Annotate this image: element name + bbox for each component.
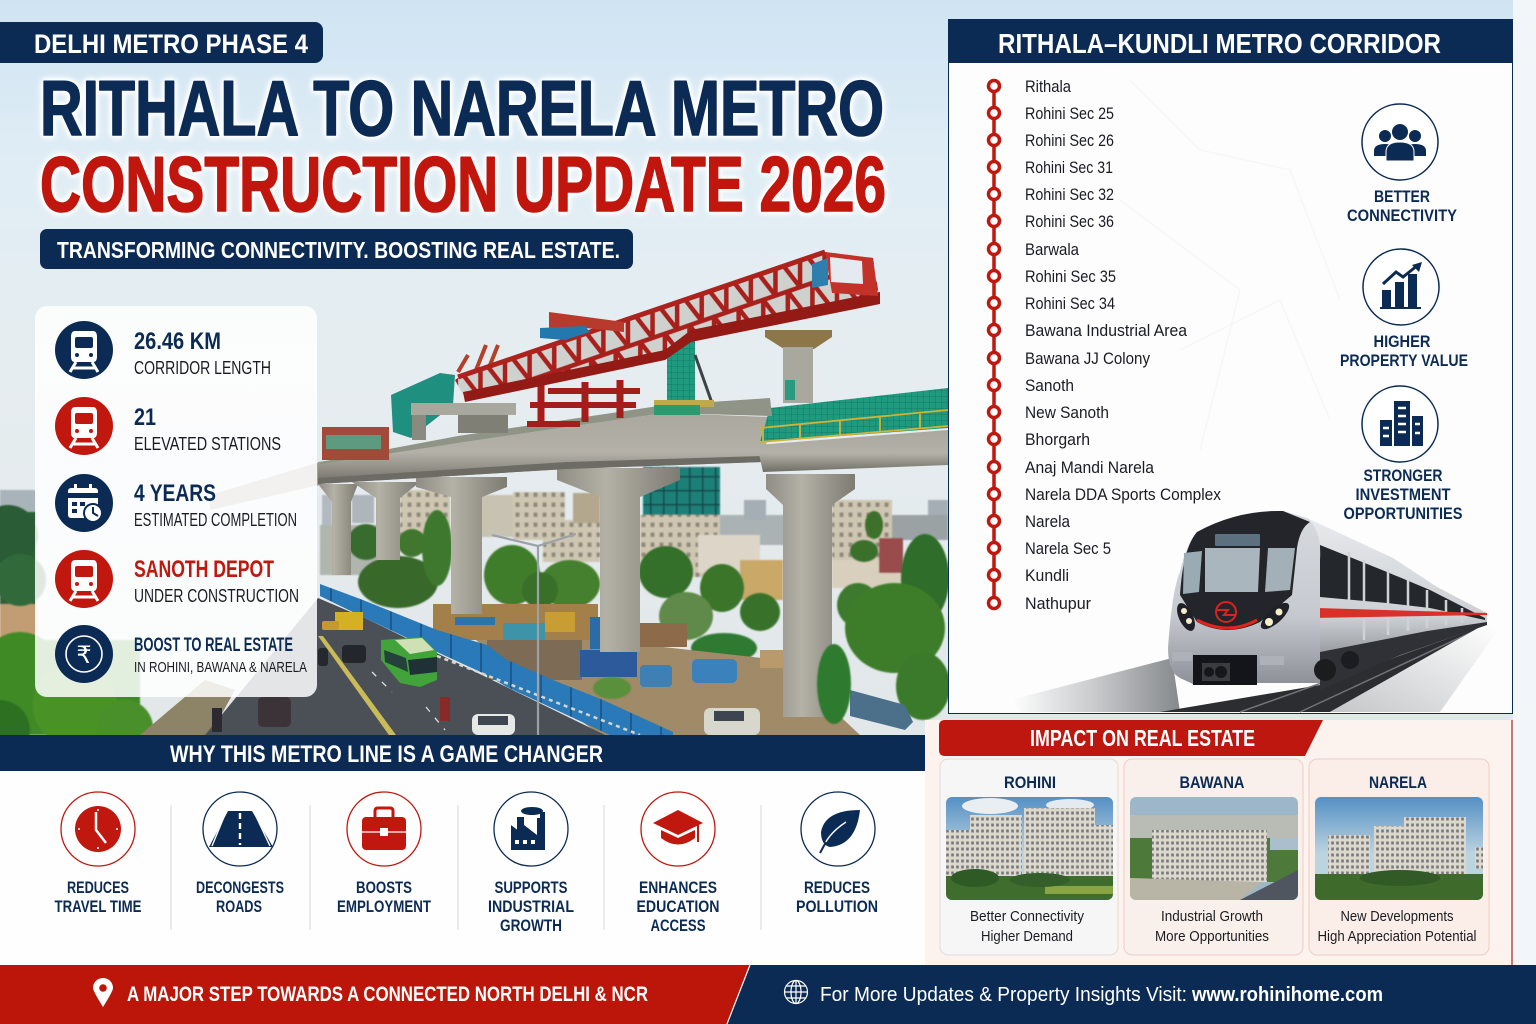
benefit: reduces pollution <box>796 792 878 916</box>
main title line 1: RITHALA TO NARELA METRO <box>40 64 884 152</box>
station names: Kundli <box>1025 566 1069 585</box>
construction photo scene <box>0 252 950 760</box>
tailing bogies <box>1314 659 1336 681</box>
metro logo <box>1216 602 1236 622</box>
gantry supports and scaffolding <box>322 303 832 460</box>
girder end cabin <box>825 252 878 296</box>
panel: game changer benefits <box>0 771 925 965</box>
metro train illustration <box>1010 511 1498 712</box>
right margin backdrop <box>1513 0 1536 965</box>
stat: boost to real estate: ₹ <box>76 641 92 669</box>
card: narela: NARELA <box>1369 773 1427 792</box>
station names: Rithala <box>1025 77 1071 96</box>
benefit: enhances education access: ENHANCES <box>639 878 717 897</box>
pier D <box>352 482 420 560</box>
benefit: reduces travel time: TRAVEL TIME <box>54 897 142 916</box>
windscreens <box>1205 548 1260 592</box>
stat: estimated completion: 4 YEARS <box>134 480 216 507</box>
viaduct deck right span <box>757 430 948 472</box>
station names: Narela DDA Sports Complex <box>1025 485 1221 504</box>
small red rig <box>322 427 389 460</box>
footer bar <box>0 965 1536 1024</box>
benefit: enhances education access: EDUCATION <box>636 897 720 916</box>
green bus <box>381 637 437 687</box>
green bush by hoarding <box>593 677 631 699</box>
benefit: stronger investment opportunities: INVESTMENT <box>1356 485 1451 504</box>
card: rohini: ROHINI <box>1004 773 1056 792</box>
image: bawana campus <box>1130 797 1298 900</box>
stat: sanoth depot: SANOTH DEPOT <box>134 556 274 583</box>
roadside strip <box>140 680 235 735</box>
road kerb <box>437 656 640 735</box>
panel: rithala-kundli corridor <box>948 19 1513 714</box>
road median line <box>318 636 396 735</box>
stat: estimated completion: ESTIMATED COMPLETION <box>134 510 297 530</box>
title tag: DELHI METRO PHASE 4 <box>34 29 308 59</box>
card: bawana: More Opportunities <box>1155 928 1269 945</box>
side window band <box>1320 545 1485 620</box>
benefit: decongests roads: DECONGESTS <box>196 878 284 897</box>
left elevated track <box>1010 658 1180 712</box>
stat: elevated stations: 21 <box>134 404 156 431</box>
right platform <box>1330 623 1498 712</box>
foreground trees left <box>0 631 154 735</box>
red crane arms <box>458 345 498 372</box>
station names: Barwala <box>1025 240 1079 259</box>
card: rohini: Better Connectivity <box>970 908 1084 925</box>
panel: impact on real estate <box>925 720 1513 965</box>
station names: Rohini Sec 35 <box>1025 267 1116 286</box>
street lamp <box>492 534 576 735</box>
benefit: higher property value <box>1340 249 1468 370</box>
road lane dashes <box>372 672 445 730</box>
rail bed <box>1160 623 1487 712</box>
green tower <box>667 303 695 403</box>
underframe and bogies <box>1320 622 1487 690</box>
card: narela: High Appreciation Potential <box>1318 928 1476 945</box>
icon: globe <box>784 980 808 1004</box>
bush in front of pier A <box>817 644 851 724</box>
stat: sanoth depot <box>55 550 299 608</box>
benefit: reduces travel time <box>54 792 142 916</box>
benefit: reduces pollution: REDUCES <box>804 878 870 897</box>
footer slogan: A MAJOR STEP TOWARDS A CONNECTED NORTH DELHI & NCR <box>127 983 648 1006</box>
station names: Bhorgarh <box>1025 430 1090 449</box>
benefit: decongests roads <box>196 792 284 916</box>
red launching girder truss <box>455 252 880 402</box>
pier A <box>766 474 855 717</box>
image: rohini towers <box>946 797 1113 900</box>
subtitle banner: TRANSFORMING CONNECTIVITY. BOOSTING REAL ESTATE. <box>57 237 620 263</box>
door frames <box>1349 552 1462 640</box>
benefit: boosts employment <box>337 792 431 916</box>
station route line <box>988 80 1000 608</box>
headlights <box>1173 599 1293 634</box>
benefit: boosts employment: BOOSTS <box>356 878 412 897</box>
station names: Narela Sec 5 <box>1025 539 1111 558</box>
station names: Rohini Sec 31 <box>1025 158 1113 177</box>
stat: corridor length: CORRIDOR LENGTH <box>134 358 271 378</box>
benefit: stronger investment opportunities: STRONGER <box>1364 466 1442 485</box>
main title line 2: CONSTRUCTION UPDATE 2026 <box>40 140 886 228</box>
dark front mask <box>1180 511 1310 630</box>
deck parapet <box>320 398 772 464</box>
station names: Bawana Industrial Area <box>1025 321 1187 340</box>
operator cabin <box>540 312 624 340</box>
stat: boost to real estate: BOOST TO REAL ESTATE <box>134 635 293 656</box>
card: narela <box>1309 759 1489 955</box>
stat: boost to real estate <box>55 625 307 683</box>
stat: corridor length: 26.46 KM <box>134 328 221 355</box>
station names: Narela <box>1025 512 1070 531</box>
red side stripe <box>1313 608 1487 618</box>
station names: Rohini Sec 36 <box>1025 212 1114 231</box>
station names: Rohini Sec 26 <box>1025 131 1114 150</box>
deck soffit shadow <box>318 456 763 484</box>
footer website address: www.rohinihome.com <box>1191 984 1383 1006</box>
background trees <box>0 505 950 720</box>
game changer heading bar <box>0 735 925 771</box>
benefit: enhances education access <box>636 792 720 935</box>
train side body <box>1307 518 1487 660</box>
benefit: supports industrial growth: INDUSTRIAL <box>488 897 574 916</box>
station names: New Sanoth <box>1025 403 1109 422</box>
station names: Bawana JJ Colony <box>1025 349 1150 368</box>
title tag <box>0 22 323 63</box>
stat: sanoth depot: UNDER CONSTRUCTION <box>134 586 299 606</box>
benefit: reduces pollution: POLLUTION <box>796 897 878 916</box>
footer website call to action: For More Updates & Property Insights Visit: <box>820 984 1187 1006</box>
icon: location pin <box>93 978 113 1007</box>
card: narela: New Developments <box>1340 908 1454 925</box>
station names: Nathupur <box>1025 594 1091 613</box>
benefit: better connectivity: CONNECTIVITY <box>1347 206 1458 225</box>
blue hoarding <box>320 584 673 735</box>
benefit: stronger investment opportunities <box>1344 386 1462 523</box>
viaduct piers <box>318 468 855 717</box>
benefit: boosts employment: EMPLOYMENT <box>337 897 431 916</box>
impact heading ribbon <box>939 720 1323 756</box>
pier C <box>416 477 507 614</box>
stat: estimated completion <box>55 474 297 532</box>
benefit: better connectivity <box>1347 104 1458 225</box>
grey segment lifter <box>411 403 516 415</box>
stat: elevated stations <box>55 397 281 455</box>
corridor heading: RITHALA–KUNDLI METRO CORRIDOR <box>998 28 1441 59</box>
stat: corridor length <box>55 321 271 379</box>
faded viaduct behind stats panel <box>210 462 320 510</box>
corridor heading <box>948 19 1513 63</box>
coupler <box>1193 655 1257 685</box>
subtitle banner <box>40 229 633 269</box>
road lanes <box>205 598 605 735</box>
footer red section <box>0 965 750 1024</box>
construction yard ground <box>476 640 860 735</box>
benefit: stronger investment opportunities: OPPORTUNITIES <box>1344 504 1462 523</box>
station names: Rohini Sec 32 <box>1025 185 1114 204</box>
benefit: reduces travel time: REDUCES <box>67 878 129 897</box>
benefit: higher property value: PROPERTY VALUE <box>1340 351 1468 370</box>
pier head support <box>765 330 832 349</box>
station names: Rohini Sec 25 <box>1025 104 1114 123</box>
yellow railing <box>760 410 948 442</box>
pier B <box>557 468 680 652</box>
card: bawana: BAWANA <box>1180 773 1244 792</box>
impact heading ribbon: IMPACT ON REAL ESTATE <box>1030 725 1255 751</box>
right truck behind trees <box>850 690 913 730</box>
card: bawana <box>1124 759 1303 955</box>
viaduct deck left span <box>318 413 771 484</box>
benefit: supports industrial growth: GROWTH <box>500 916 562 935</box>
station names: Sanoth <box>1025 376 1074 395</box>
benefit: better connectivity: BETTER <box>1374 187 1430 206</box>
background sky <box>0 0 1536 735</box>
front lamps <box>1172 652 1192 661</box>
station names: Rohini Sec 34 <box>1025 294 1115 313</box>
distant city skyline <box>0 467 948 641</box>
card: rohini: Higher Demand <box>981 928 1073 945</box>
image: narela towers <box>1315 797 1483 900</box>
road vehicles and yard vehicles <box>212 612 760 735</box>
station names: Anaj Mandi Narela <box>1025 458 1154 477</box>
benefit: enhances education access: ACCESS <box>650 916 706 935</box>
train front <box>1168 511 1320 684</box>
benefit: supports industrial growth: SUPPORTS <box>494 878 568 897</box>
red cheek line <box>1197 620 1257 628</box>
card: rohini <box>940 759 1118 955</box>
game changer heading bar: WHY THIS METRO LINE IS A GAME CHANGER <box>170 741 603 768</box>
benefit: higher property value: HIGHER <box>1374 332 1430 351</box>
panel: key stats <box>35 306 317 697</box>
green safety net on right span <box>760 388 948 442</box>
stat: boost to real estate: IN ROHINI, BAWANA & NARELA <box>134 659 307 676</box>
pier E <box>318 484 358 575</box>
benefit: decongests roads: ROADS <box>216 897 262 916</box>
stat: elevated stations: ELEVATED STATIONS <box>134 434 281 454</box>
red frame support <box>527 391 640 424</box>
left teal formwork <box>391 373 455 438</box>
card: bawana: Industrial Growth <box>1161 908 1263 925</box>
benefit: supports industrial growth <box>488 792 574 935</box>
station names <box>1025 77 1221 613</box>
blue construction machine <box>580 650 637 677</box>
yard machinery and materials <box>433 604 790 680</box>
